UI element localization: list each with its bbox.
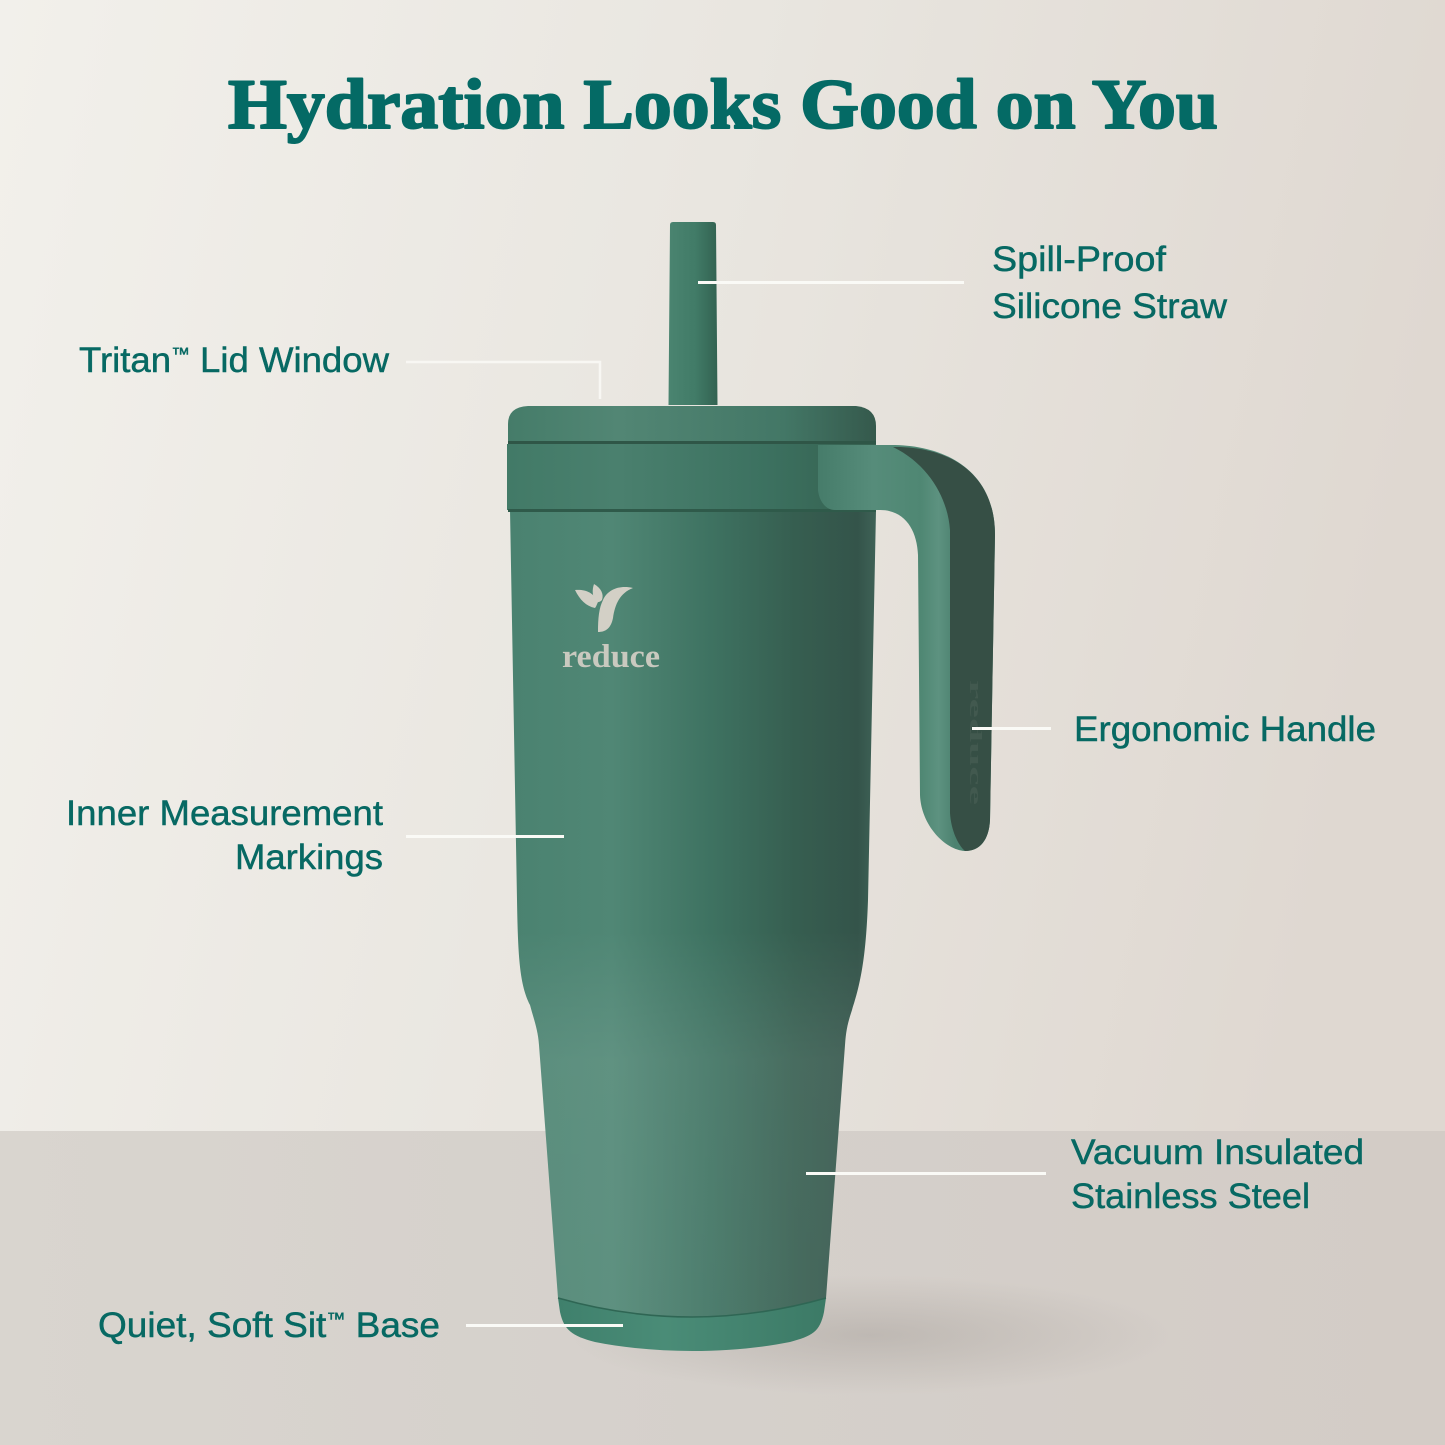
tumbler shadow bbox=[570, 1275, 1170, 1395]
logo leaf mark bbox=[575, 584, 633, 632]
label: Quiet, Soft Sit bbox=[98, 1306, 314, 1345]
logo: reduce bbox=[562, 584, 660, 675]
label bbox=[66, 794, 383, 877]
label bbox=[1071, 1133, 1364, 1216]
callout: measurement markings bbox=[66, 794, 564, 877]
label: Base bbox=[345, 1306, 440, 1345]
label: Inner Measurement bbox=[66, 794, 383, 833]
label: ™ bbox=[171, 344, 190, 364]
background wall bbox=[0, 0, 1445, 1132]
label: Vacuum Insulated bbox=[1071, 1133, 1364, 1172]
handle embossed mark: reduce bbox=[966, 680, 985, 806]
label: Ergonomic Handle bbox=[1074, 710, 1376, 749]
label: Stainless Steel bbox=[1071, 1177, 1310, 1216]
upper collar bbox=[507, 444, 876, 510]
handle bbox=[818, 445, 995, 851]
collar seam bbox=[508, 509, 876, 512]
label: Lid Window bbox=[190, 341, 390, 380]
lid bbox=[508, 406, 876, 442]
tumbler body bbox=[510, 510, 876, 1317]
tumbler illustration bbox=[507, 222, 995, 1351]
callout: insulation bbox=[806, 1133, 1364, 1216]
background floor bbox=[0, 1131, 1445, 1445]
callout: lid window bbox=[79, 341, 600, 399]
logo wordmark: reduce bbox=[562, 639, 660, 675]
lid seam bbox=[508, 441, 876, 444]
leader line bbox=[466, 1324, 623, 1327]
title: Hydration Looks Good on You bbox=[228, 66, 1218, 144]
label: Markings bbox=[235, 838, 383, 877]
label: Tritan bbox=[79, 341, 167, 380]
label: Silicone Straw bbox=[992, 287, 1228, 326]
callout: handle bbox=[972, 710, 1376, 749]
handle outer face bbox=[893, 447, 995, 851]
leader line bbox=[406, 362, 600, 399]
leader line bbox=[972, 727, 1051, 730]
leader line bbox=[406, 835, 564, 838]
label: ™ bbox=[326, 1309, 345, 1329]
leader line bbox=[698, 281, 964, 284]
base seam bbox=[558, 1298, 826, 1317]
callout: base bbox=[98, 1306, 623, 1345]
leader line bbox=[806, 1172, 1046, 1175]
base bbox=[558, 1298, 826, 1351]
label: Spill-Proof bbox=[992, 240, 1166, 279]
label bbox=[992, 240, 1228, 326]
straw bbox=[668, 222, 718, 405]
tumbler lower highlight bbox=[510, 510, 876, 1317]
callout: straw bbox=[698, 240, 1228, 326]
